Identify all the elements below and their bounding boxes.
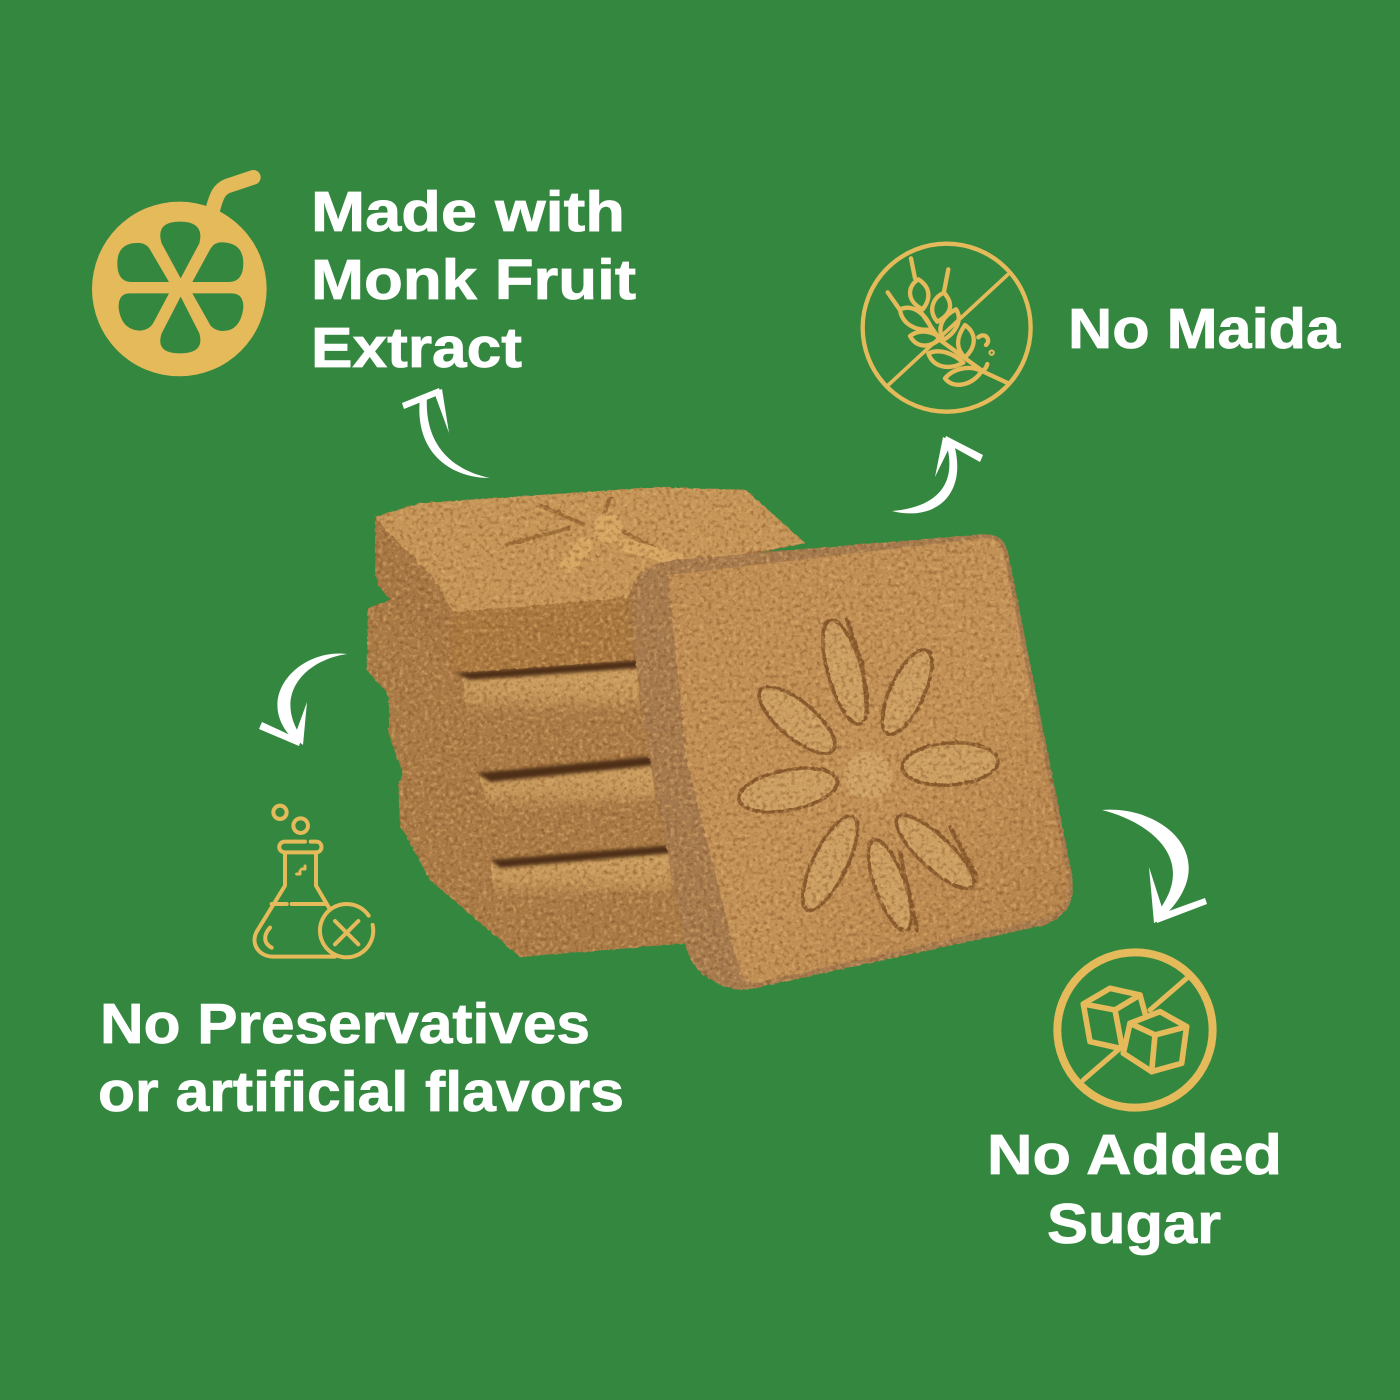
biscuit: bottom of stack highlight — [490, 848, 672, 900]
arrow: to preservatives — [259, 654, 347, 746]
heading: no maida: No Maida — [1068, 297, 1341, 361]
heading: made with monk fruit extract: Extract — [311, 316, 522, 380]
icon: no preservatives flask — [255, 806, 373, 957]
arrow: to no added sugar — [1102, 810, 1207, 923]
stack gap shadows — [455, 660, 674, 868]
arrow: to monk fruit — [402, 388, 490, 478]
icon: no wheat — [863, 244, 1031, 412]
heading: made with monk fruit extract — [311, 180, 636, 380]
heading: no added sugar: Sugar — [1047, 1192, 1221, 1256]
biscuit: second in stack highlight — [463, 665, 640, 715]
biscuit: stack base silhouette — [367, 560, 690, 957]
biscuit: front with flower imprint — [632, 534, 1073, 990]
heading: no preservatives: No Preservatives — [100, 992, 590, 1056]
biscuit: top of stack — [375, 487, 805, 672]
heading: made with monk fruit extract: Monk Fruit — [311, 248, 636, 312]
heading: made with monk fruit extract: Made with — [311, 180, 625, 244]
heading: no preservatives: or artificial flavors — [98, 1060, 624, 1124]
arrow: to no maida — [892, 436, 983, 513]
heading: no preservatives — [98, 992, 624, 1124]
biscuit stack — [367, 487, 1073, 990]
heading: no added sugar — [987, 1123, 1282, 1256]
icon: no added sugar cubes — [1057, 952, 1213, 1108]
biscuit: third in stack highlight — [480, 760, 655, 812]
flower imprint — [735, 615, 999, 935]
heading: no added sugar: No Added — [987, 1123, 1282, 1187]
icon: monk fruit — [92, 177, 267, 376]
